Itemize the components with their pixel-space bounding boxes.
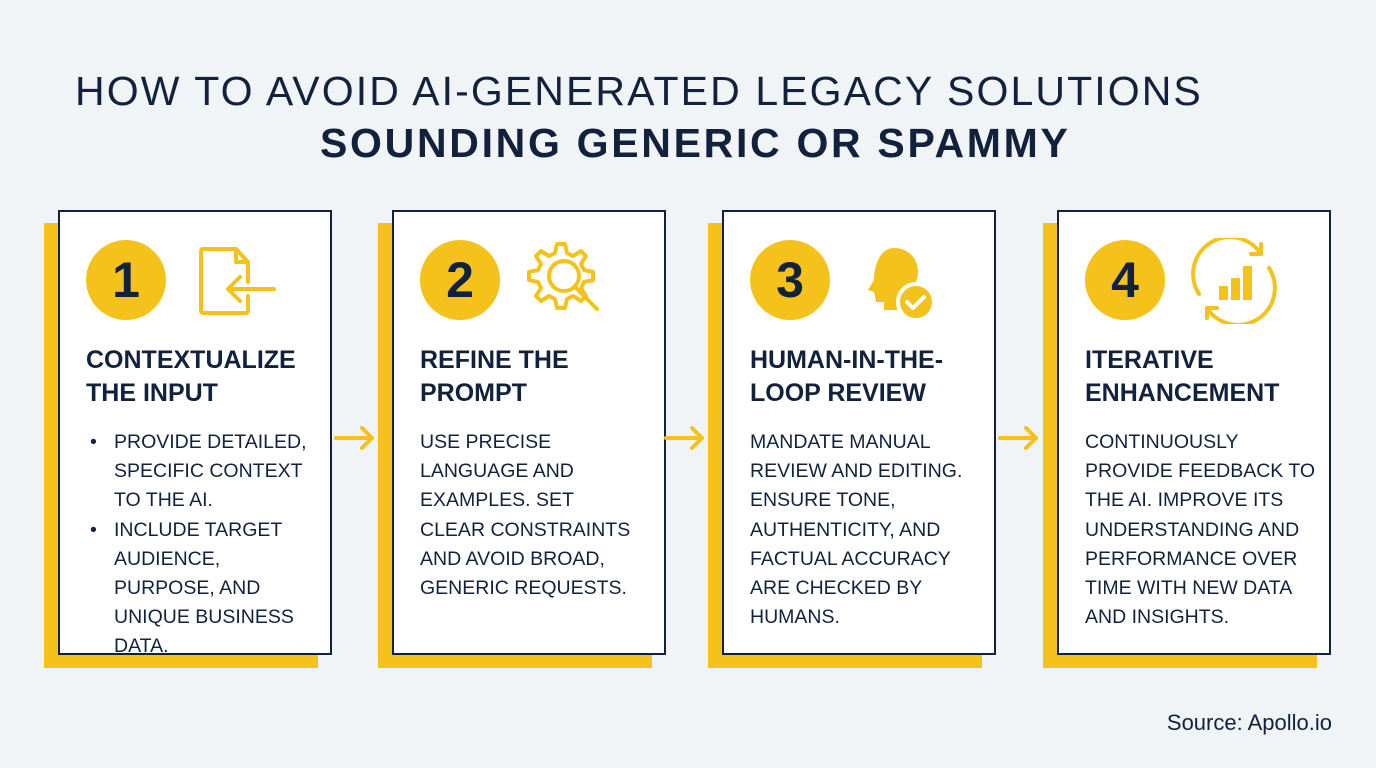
heading: ITERATIVE	[1085, 346, 1214, 374]
number 2: 2	[446, 252, 474, 308]
panel: step 1	[44, 210, 332, 668]
heading	[1085, 346, 1280, 407]
number 3: 3	[776, 252, 804, 308]
heading: HUMAN-IN-THE-	[750, 346, 943, 374]
body	[90, 431, 307, 657]
body: INCLUDE TARGET AUDIENCE, PURPOSE, AND UNIQUE BUSINESS DATA.	[114, 519, 294, 657]
subtitle: SOUNDING GENERIC OR SPAMMY	[320, 120, 1071, 166]
title: HOW TO AVOID AI-GENERATED LEGACY SOLUTIONS	[75, 68, 1203, 114]
number 4: 4	[1111, 252, 1139, 308]
heading	[750, 346, 943, 407]
arrow 3	[998, 426, 1038, 450]
panel: step 4	[1043, 210, 1331, 668]
heading: PROMPT	[420, 379, 527, 407]
heading: REFINE THE	[420, 346, 569, 374]
body: PROVIDE DETAILED, SPECIFIC CONTEXT TO THE AI.	[114, 431, 307, 511]
heading: LOOP REVIEW	[750, 379, 926, 407]
icon: cycle chart	[1191, 238, 1277, 324]
panel: step 2	[378, 210, 666, 668]
number 1: 1	[112, 252, 140, 308]
icon: head check	[868, 248, 932, 318]
number 4	[1085, 240, 1165, 320]
heading: ENHANCEMENT	[1085, 379, 1279, 407]
number 3	[750, 240, 830, 320]
icon: gear magnifier	[527, 242, 600, 312]
body: USE PRECISE LANGUAGE AND EXAMPLES. SET CLEAR CONSTRAINTS AND AVOID BROAD, GENERIC REQUESTS.	[420, 431, 630, 599]
number 1	[86, 240, 166, 320]
source: Source: Apollo.io	[1167, 710, 1332, 735]
icon: document import	[199, 247, 276, 315]
heading: THE INPUT	[86, 379, 218, 407]
body: MANDATE MANUAL REVIEW AND EDITING. ENSURE TONE, AUTHENTICITY, AND FACTUAL ACCURACY ARE CHECKED BY HUMANS.	[750, 431, 962, 628]
heading	[86, 346, 296, 407]
number 2	[420, 240, 500, 320]
arrow 2	[664, 426, 704, 450]
panel: step 3	[708, 210, 996, 668]
body: CONTINUOUSLY PROVIDE FEEDBACK TO THE AI. IMPROVE ITS UNDERSTANDING AND PERFORMANCE OVER TIME WITH NEW DATA AND INSIGHTS.	[1085, 431, 1315, 628]
heading: CONTEXTUALIZE	[86, 346, 296, 374]
heading	[420, 346, 569, 407]
arrow 1	[334, 426, 374, 450]
